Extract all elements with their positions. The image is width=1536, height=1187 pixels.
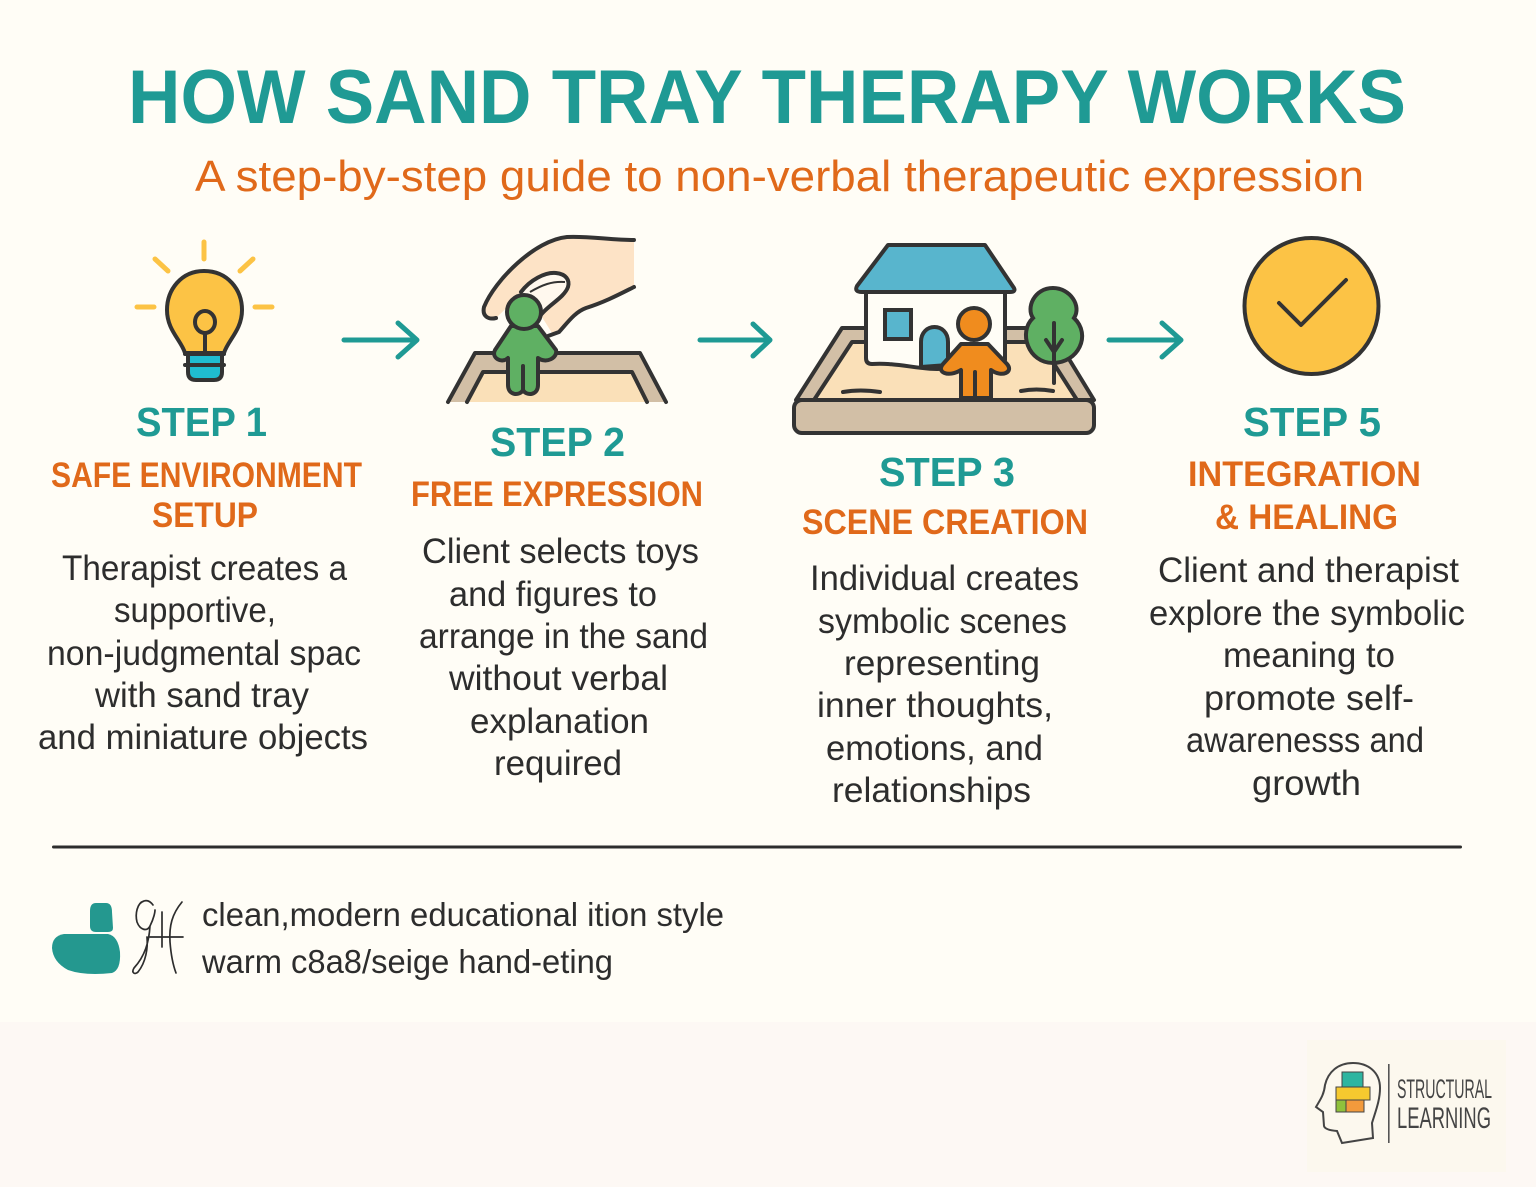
step 2 description: required bbox=[494, 744, 622, 783]
step 1 description: supportive, bbox=[114, 591, 276, 630]
step 5 heading bbox=[1188, 455, 1421, 537]
logo: Structural Learning bbox=[1307, 1040, 1506, 1172]
step 2 description bbox=[419, 532, 708, 783]
step 3 block bbox=[802, 449, 1088, 810]
step 3 description: emotions, and bbox=[826, 729, 1043, 768]
step 1 description: non-judgmental spac bbox=[47, 634, 361, 673]
step 5 description bbox=[1149, 551, 1465, 803]
step 2 description: Client selects toys bbox=[422, 532, 699, 571]
footer icon: signature mark bbox=[133, 901, 183, 973]
step 3 description bbox=[810, 559, 1079, 810]
step 2 description: arrange in the sand bbox=[419, 617, 708, 656]
icon: hand placing figure in tray bbox=[448, 237, 666, 402]
footer icon: teal blobs bbox=[52, 903, 120, 974]
logo icon: head with blocks bbox=[1316, 1063, 1380, 1143]
step 3 description: inner thoughts, bbox=[817, 686, 1053, 725]
step 1 description bbox=[38, 549, 368, 757]
step 1 description: and miniature objects bbox=[38, 718, 368, 757]
step 1 block bbox=[38, 399, 368, 757]
title: HOW SAND TRAY THERAPY WORKS bbox=[128, 55, 1406, 140]
step 5 heading: & HEALING bbox=[1215, 498, 1398, 537]
arrow: step 3 to step 5 bbox=[1109, 323, 1181, 357]
step 5 description: meaning to bbox=[1223, 636, 1395, 675]
icon: check mark circle bbox=[1244, 238, 1378, 374]
step 2 heading: FREE EXPRESSION bbox=[411, 475, 703, 514]
step 5 description: awarenesss and bbox=[1186, 721, 1424, 760]
step 5 description: Client and therapist bbox=[1158, 551, 1459, 590]
icon: sand tray scene with house, person and tree bbox=[794, 245, 1094, 433]
step 1 heading: SAFE ENVIRONMENT bbox=[51, 456, 362, 495]
step 5 label: STEP 5 bbox=[1243, 399, 1381, 445]
step 2 description: without verbal bbox=[448, 659, 668, 698]
step 3 description: symbolic scenes bbox=[818, 602, 1067, 641]
step 5 heading: INTEGRATION bbox=[1188, 455, 1421, 494]
icon: light bulb bbox=[137, 242, 272, 380]
footer text bbox=[201, 896, 724, 980]
step 5 description: promote self- bbox=[1204, 679, 1414, 718]
step 1 heading: SETUP bbox=[152, 496, 258, 535]
step 5 description: growth bbox=[1252, 764, 1361, 803]
step 3 description: representing bbox=[844, 644, 1040, 683]
arrow: step 2 to step 3 bbox=[700, 324, 770, 356]
step 3 heading: SCENE CREATION bbox=[802, 503, 1088, 542]
footer text: warm c8a8/seige hand-eting bbox=[201, 943, 613, 980]
step 3 description: Individual creates bbox=[810, 559, 1079, 598]
step 2 description: and figures to bbox=[449, 575, 657, 614]
step 1 heading bbox=[51, 456, 362, 535]
footer text: clean,modern educational ition style bbox=[202, 896, 724, 933]
step 2 description: explanation bbox=[470, 702, 649, 741]
step 3 description: relationships bbox=[832, 771, 1031, 810]
subtitle: A step-by-step guide to non-verbal therapeutic expression bbox=[195, 152, 1364, 201]
step 5 block bbox=[1149, 399, 1465, 803]
step 5 description: explore the symbolic bbox=[1149, 594, 1465, 633]
step 1 description: Therapist creates a bbox=[62, 549, 348, 588]
step 2 label: STEP 2 bbox=[490, 419, 625, 465]
step 1 description: with sand tray bbox=[94, 676, 309, 715]
step 1 label: STEP 1 bbox=[136, 399, 267, 445]
step 2 block bbox=[411, 419, 708, 783]
arrow: step 1 to step 2 bbox=[344, 323, 417, 357]
step 3 label: STEP 3 bbox=[879, 449, 1015, 495]
logo wordmark bbox=[1397, 1074, 1492, 1135]
